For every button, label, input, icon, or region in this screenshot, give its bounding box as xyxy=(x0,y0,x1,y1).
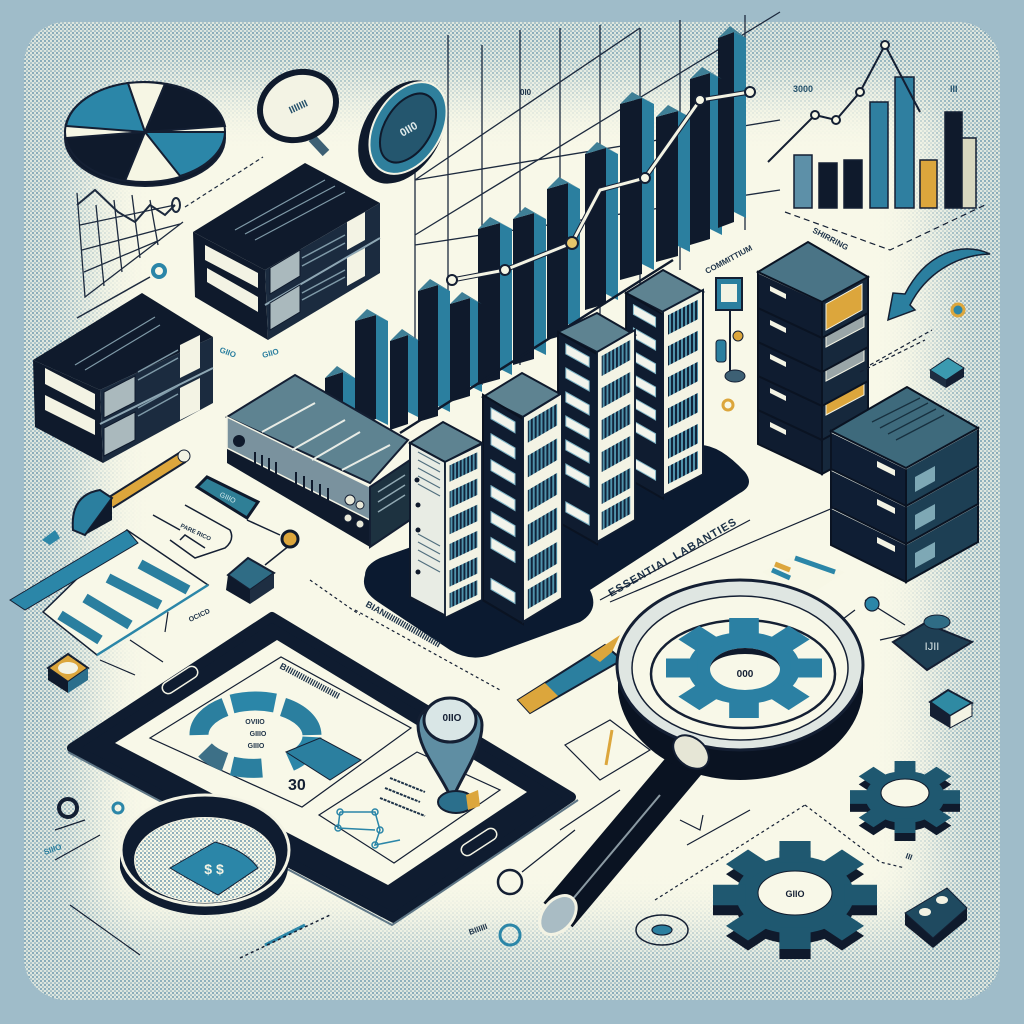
connector dots xyxy=(310,304,964,690)
text: donut labels: GIIIO xyxy=(248,743,265,750)
icon: stacked book left xyxy=(48,654,88,693)
icon: small sign post xyxy=(716,278,745,382)
icon: gear bottom right xyxy=(713,841,877,959)
icon: gear bottom right: GIIO xyxy=(785,889,805,899)
icon: location pin lens: 0IIO xyxy=(443,713,462,724)
icon: hammer xyxy=(42,450,190,545)
icon: chip tag xyxy=(197,477,258,518)
panel: line grid behind main chart xyxy=(415,12,780,410)
icon: small cube right xyxy=(930,690,972,728)
chart: tablet network xyxy=(335,809,400,848)
icon: yellow usb tag xyxy=(518,635,622,713)
panel: left bar list xyxy=(10,530,211,675)
text: small scattered labels xyxy=(43,88,914,937)
panel: top right bar chart: III xyxy=(950,84,958,94)
label: top right annotations xyxy=(704,226,850,276)
server tower B xyxy=(483,373,562,624)
label: top right annotations: COMMITTIUM xyxy=(704,243,754,276)
text: donut labels: GIIIO xyxy=(250,731,267,738)
icon: dark lens disc xyxy=(340,64,464,200)
flow connector left xyxy=(153,505,298,565)
chart: tablet donut xyxy=(199,701,312,768)
text: tablet value: 30 xyxy=(288,777,306,794)
tablet: screen frames xyxy=(150,657,500,863)
text: small scattered labels: GIIO xyxy=(261,347,280,360)
text: small scattered labels: SIIIO xyxy=(43,842,63,857)
icon: magnifier lens bottom left: $ $ xyxy=(204,861,224,877)
text: small scattered labels: III xyxy=(904,851,914,862)
server tower D xyxy=(626,270,703,499)
icon: teal corner chart lines xyxy=(240,915,330,958)
icon: gear right xyxy=(850,761,960,841)
text: tablet heading: BIIIIIIIIIIIIIIIIIIIIIIII xyxy=(278,661,341,701)
arrow: curved teal xyxy=(888,249,990,320)
flow connector left: PARE RICO xyxy=(179,523,212,543)
icon: magnifier top centre xyxy=(245,56,351,156)
icon: magnifier lens bottom left xyxy=(120,795,289,915)
panel: top right bar chart xyxy=(768,41,985,250)
text: tablet side lines xyxy=(380,778,425,816)
server tower C xyxy=(558,313,635,544)
text: donut labels xyxy=(245,719,267,750)
trend line on main chart xyxy=(447,87,755,285)
server stack upper left xyxy=(193,163,380,340)
text: long label: BIANIIIIIIIIIIIIIIIIIIIIIIIII xyxy=(364,599,442,649)
text: small scattered labels: BIIIIII xyxy=(468,922,489,937)
icon: dark lens disc: 0II0 xyxy=(398,120,420,140)
icon: large magnifier xyxy=(532,580,863,941)
server stack mid left xyxy=(33,293,213,463)
icon: tablet card xyxy=(286,738,361,780)
panel: tablet xyxy=(68,617,578,925)
icon: large magnifier: 000 xyxy=(737,669,754,680)
icon: small cube upper right xyxy=(930,358,964,388)
icon: location pin lens xyxy=(418,698,482,813)
diagram: lower right connectors xyxy=(55,720,905,955)
icon: small cube left xyxy=(226,558,274,604)
icon: small chart card right xyxy=(762,555,845,598)
icon: chip tag: GIIIO xyxy=(218,492,237,505)
server tower A xyxy=(410,422,482,618)
pie chart xyxy=(65,82,225,186)
floor edge line xyxy=(400,260,673,433)
router box xyxy=(227,375,410,547)
text: small scattered labels: GIIO xyxy=(218,345,237,360)
icon: small block bottom right xyxy=(905,888,967,948)
label: top right annotations: SHIRRING xyxy=(811,226,850,252)
server stack right large xyxy=(831,387,978,582)
panel: left bar list: OCICD xyxy=(188,608,211,624)
text: heading label centre: ESSENTIAL LABANTIES xyxy=(606,516,739,600)
panel: top right bar chart: 3000 xyxy=(793,84,813,94)
small line chart top left xyxy=(77,157,263,318)
text: small scattered labels: 0I0 xyxy=(520,88,532,97)
icon: dark chip right: IJII xyxy=(925,641,939,653)
icon: dark chip right xyxy=(893,615,972,670)
text: donut labels: OVIIO xyxy=(245,719,265,726)
server stack right tall xyxy=(758,242,868,474)
dark platform xyxy=(364,445,749,658)
bar chart: main isometric bars xyxy=(325,26,746,430)
icon: magnifier top centre: IIIIIII xyxy=(287,98,310,116)
